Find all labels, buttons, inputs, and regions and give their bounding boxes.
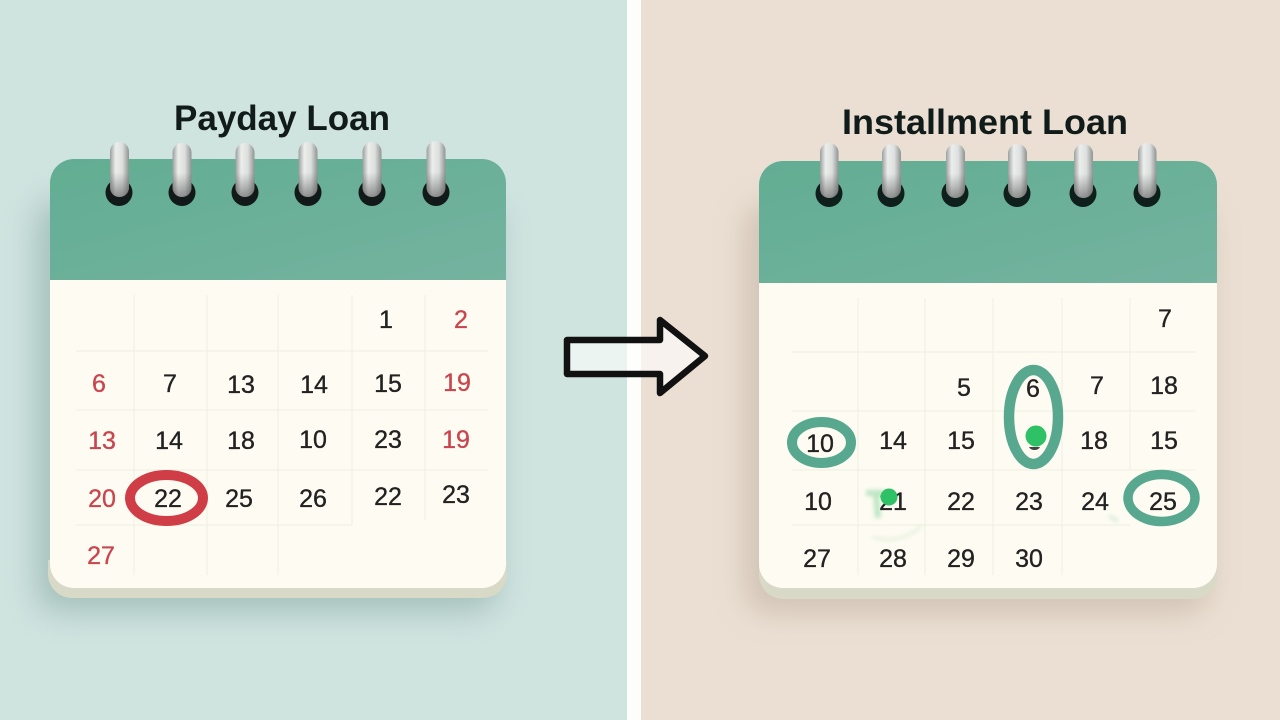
calendar page bbox=[759, 278, 1217, 588]
green circles around payment dates bbox=[792, 370, 1195, 522]
calendar dates: 27 bbox=[803, 545, 831, 573]
calendar dates: 30 bbox=[1015, 545, 1043, 573]
calendar dates: 29 bbox=[947, 545, 975, 573]
calendar dates: 15 bbox=[947, 427, 975, 455]
divider: white gutter bbox=[627, 0, 641, 720]
calendar dates: 2 bbox=[454, 306, 468, 334]
calendar dates: 6 bbox=[92, 370, 106, 398]
calendar dates: 23 bbox=[1015, 488, 1043, 516]
calendar dates: 7 bbox=[1090, 372, 1104, 400]
title: Installment Loan: Installment Loan bbox=[842, 103, 1128, 142]
calendar base lip bbox=[759, 560, 1217, 599]
calendar dates: 22 bbox=[374, 483, 402, 511]
calendar dates: 26 bbox=[299, 485, 327, 513]
title: Payday Loan: Payday Loan bbox=[174, 99, 390, 138]
panel: right background bbox=[641, 0, 1280, 720]
panel: payday loan calendar bbox=[36, 141, 507, 612]
calendar dates: 14 bbox=[155, 427, 183, 455]
calendar dates: 24 bbox=[1081, 488, 1109, 516]
calendar dates: 23 bbox=[374, 426, 402, 454]
calendar dates: 23 bbox=[442, 481, 470, 509]
binding rings bbox=[816, 143, 1160, 207]
grid lines bbox=[792, 298, 1195, 575]
calendar dates: 18 bbox=[227, 427, 255, 455]
dark remnant below green dot bbox=[1029, 447, 1040, 450]
grid lines bbox=[76, 295, 488, 575]
calendar dates bbox=[87, 306, 471, 570]
calendar dates: 6 bbox=[1026, 375, 1040, 403]
calendar dates: 14 bbox=[300, 371, 328, 399]
calendar dates: 22 bbox=[154, 485, 182, 513]
calendar dates: 28 bbox=[879, 545, 907, 573]
calendar base lip bbox=[48, 560, 507, 598]
arrow bbox=[567, 320, 705, 393]
calendar dates: 19 bbox=[443, 369, 471, 397]
panel: installment loan calendar bbox=[745, 143, 1217, 613]
binding rings bbox=[106, 141, 450, 206]
green dots bbox=[880, 426, 1046, 506]
panel: left background bbox=[0, 0, 627, 720]
calendar dates: 18 bbox=[1080, 427, 1108, 455]
calendar dates: 22 bbox=[947, 488, 975, 516]
calendar dates: 25 bbox=[1149, 488, 1177, 516]
red circle around due date 22 bbox=[130, 475, 203, 521]
calendar page bbox=[50, 275, 506, 588]
calendar dates: 15 bbox=[374, 370, 402, 398]
calendar dates: 21 bbox=[879, 488, 907, 516]
calendar dates bbox=[803, 305, 1178, 573]
calendar dates: 10 bbox=[804, 488, 832, 516]
smudge near 21 bbox=[866, 493, 1118, 539]
calendar header bbox=[759, 161, 1217, 283]
calendar dates: 14 bbox=[879, 427, 907, 455]
calendar dates: 19 bbox=[442, 426, 470, 454]
calendar dates: 7 bbox=[163, 370, 177, 398]
calendar dates: 18 bbox=[1150, 372, 1178, 400]
calendar dates: 10 bbox=[806, 430, 834, 458]
calendar header bbox=[50, 159, 506, 280]
calendar dates: 1 bbox=[379, 306, 393, 334]
calendar dates: 27 bbox=[87, 542, 115, 570]
calendar dates: 5 bbox=[957, 374, 971, 402]
calendar dates: 10 bbox=[299, 426, 327, 454]
calendar dates: 13 bbox=[88, 427, 116, 455]
calendar dates: 20 bbox=[88, 485, 116, 513]
calendar dates: 7 bbox=[1158, 305, 1172, 333]
calendar dates: 15 bbox=[1150, 427, 1178, 455]
calendar dates: 25 bbox=[225, 485, 253, 513]
calendar dates: 13 bbox=[227, 371, 255, 399]
